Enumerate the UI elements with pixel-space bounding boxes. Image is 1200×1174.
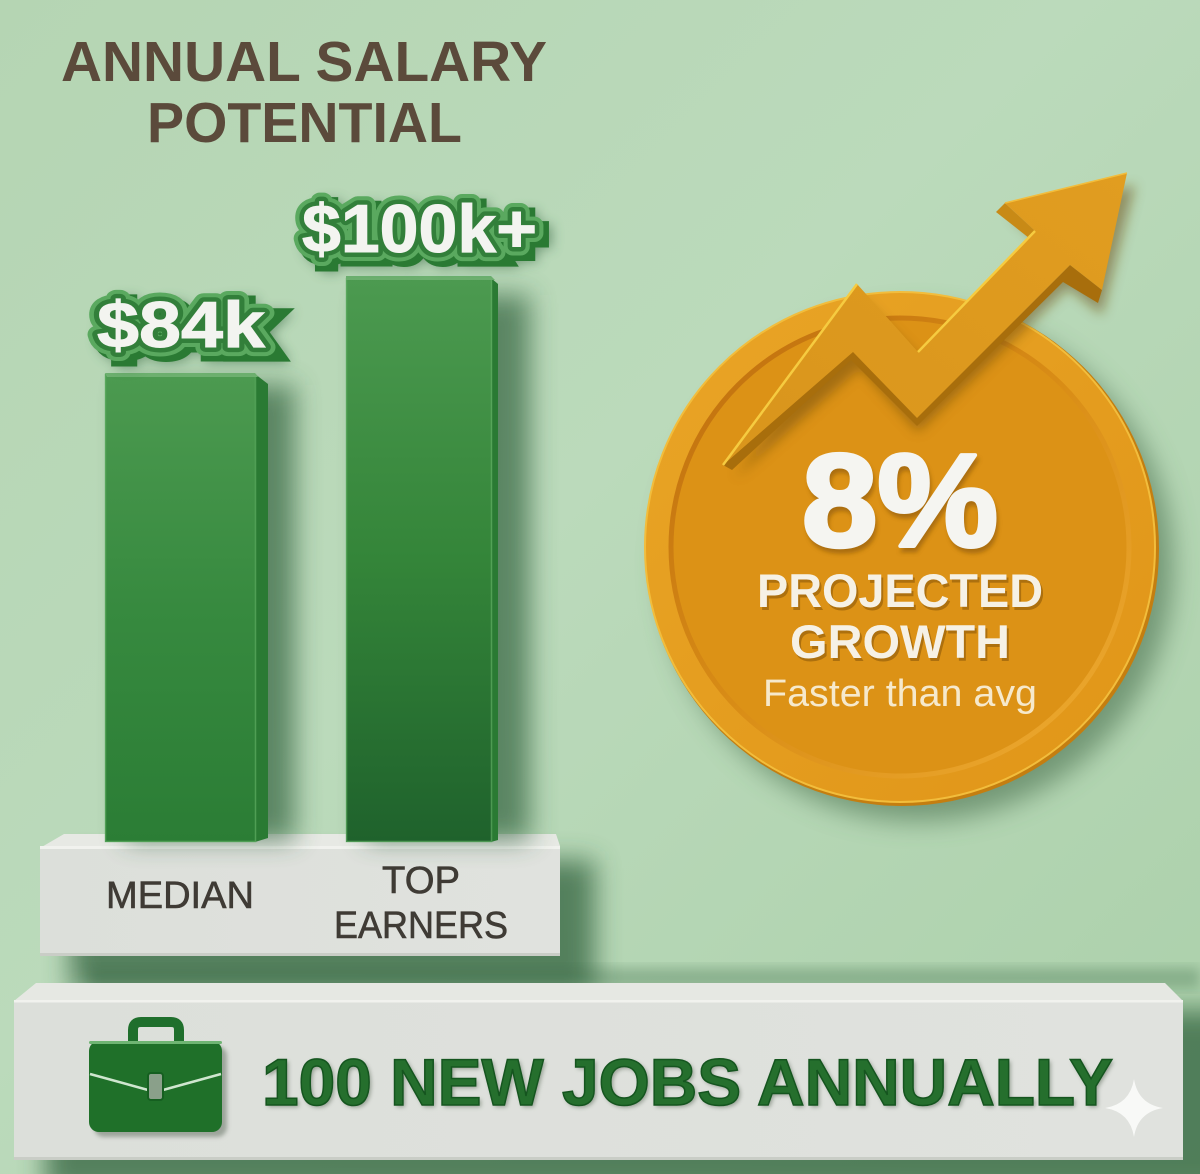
value: $100k+: $100k+ xyxy=(307,196,542,272)
faster than avg: Faster than avg xyxy=(763,673,1037,715)
8%: 8% xyxy=(802,427,998,574)
bar: top earners xyxy=(346,276,530,842)
icon: briefcase xyxy=(89,1022,227,1137)
value: $84k: $84k xyxy=(97,288,266,361)
arrow xyxy=(723,173,1135,478)
coin xyxy=(645,292,1159,806)
value: $84k: $84k xyxy=(97,288,266,361)
label: median: MEDIAN xyxy=(106,875,254,917)
value: $84k: $84k xyxy=(106,295,275,368)
bar: median xyxy=(105,373,295,842)
jobs text: 100 NEW JOBS ANNUALLY xyxy=(262,1045,1113,1119)
icon: sparkle xyxy=(1105,1079,1163,1137)
label: top earners xyxy=(334,860,508,947)
title xyxy=(61,30,547,155)
value: $100k+: $100k+ xyxy=(302,191,537,267)
shelf with bar labels xyxy=(40,834,595,992)
label: top earners: EARNERS xyxy=(334,905,508,947)
projected growth: GROWTH xyxy=(792,618,1012,671)
jobs text: 100 NEW JOBS ANNUALLY xyxy=(264,1047,1115,1121)
projected growth xyxy=(757,564,1045,671)
title: POTENTIAL xyxy=(147,91,462,155)
jobs banner xyxy=(14,968,1200,1174)
projected growth: PROJECTED xyxy=(759,567,1045,620)
value: $84k: $84k xyxy=(103,293,272,366)
value: $100k+: $100k+ xyxy=(302,191,537,267)
value: $84k: $84k xyxy=(97,288,266,361)
value: $100k+: $100k+ xyxy=(302,191,537,267)
value: $100k+: $100k+ xyxy=(311,198,546,274)
projected growth: GROWTH xyxy=(790,615,1010,668)
title: ANNUAL SALARY xyxy=(61,30,547,94)
8%: 8% xyxy=(804,432,1000,579)
projected growth: PROJECTED xyxy=(757,564,1043,617)
growth badge xyxy=(645,173,1173,821)
label: top earners: TOP xyxy=(382,860,460,902)
